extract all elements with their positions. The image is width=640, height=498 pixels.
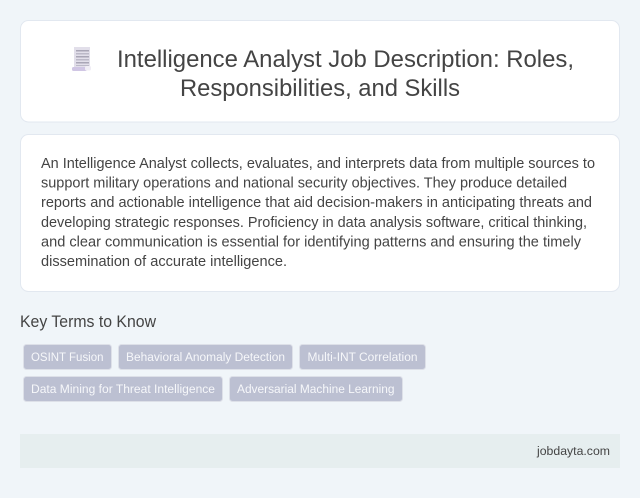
text block: description: reports and actionable intelligence that aid decision-makers in anticipating threats and [41, 195, 592, 211]
tag: Behavioral Anomaly Detection [118, 344, 292, 370]
tag list: key terms [24, 344, 426, 402]
title: Intelligence Analyst Job Description: Roles, [117, 46, 574, 73]
tag: Data Mining for Threat Intelligence [24, 376, 222, 402]
tag: Behavioral Anomaly Detection: Behavioral Anomaly Detection [126, 350, 285, 364]
tag: Adversarial Machine Learning: Adversarial Machine Learning [237, 382, 395, 396]
text block: description: support military operations and national security objectives. They produce detailed [41, 176, 567, 192]
tag: OSINT Fusion: OSINT Fusion [31, 350, 104, 364]
title: Responsibilities, and Skills [180, 75, 460, 102]
tag: OSINT Fusion [24, 344, 112, 370]
text block: description: dissemination of accurate intelligence. [41, 254, 287, 270]
heading: key terms: Key Terms to Know [20, 313, 156, 331]
tag: Multi-INT Correlation: Multi-INT Correlation [308, 350, 418, 364]
icon: document scroll [72, 47, 91, 71]
text block: description: developing strategic responses. Proficiency in data analysis software, critical thinking, [41, 215, 587, 231]
tag: Multi-INT Correlation [300, 344, 426, 370]
tag: Data Mining for Threat Intelligence: Data Mining for Threat Intelligence [31, 382, 215, 396]
footer text: source: jobdayta.com [536, 444, 610, 458]
text block: description: and clear communication is essential for identifying patterns and ensuring the timely [41, 234, 582, 250]
text block: description: An Intelligence Analyst collects, evaluates, and interprets data from multiple sources to [41, 156, 595, 172]
panel: job description [20, 134, 620, 292]
footer bar [20, 434, 620, 468]
panel: title header [20, 20, 620, 122]
tag: Adversarial Machine Learning [230, 376, 402, 402]
